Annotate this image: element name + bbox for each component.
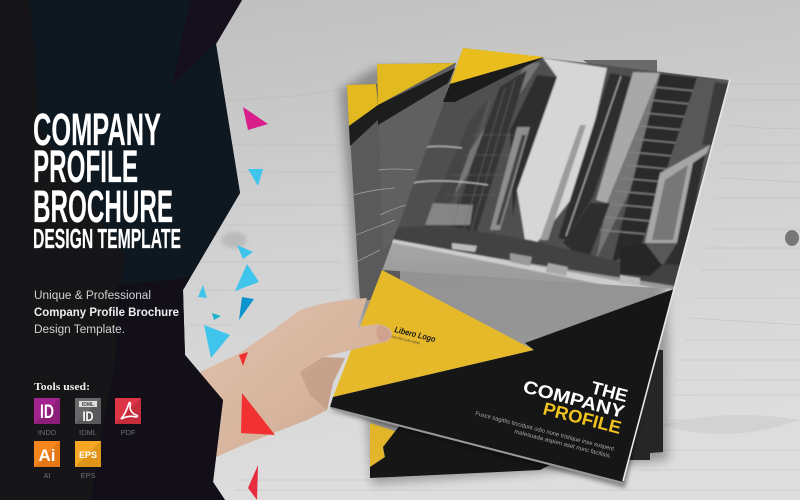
cover title: THE bbox=[589, 378, 630, 406]
icon: AI: Ai bbox=[38, 446, 56, 465]
icon: PDF: PDF bbox=[120, 428, 136, 437]
cover title: PROFILE bbox=[541, 399, 623, 438]
triangle teal bbox=[212, 313, 221, 320]
right buildings bbox=[558, 72, 730, 285]
triangle cyan 2 bbox=[237, 245, 253, 259]
triangle cyan large bbox=[204, 325, 230, 358]
cover shadow bbox=[328, 400, 640, 488]
yellow cover triangle bbox=[333, 270, 534, 397]
main title: DESIGN TEMPLATE bbox=[33, 223, 181, 254]
tools heading: Tools used: bbox=[34, 381, 90, 393]
description text: Design Template. bbox=[34, 324, 125, 336]
sky bbox=[517, 58, 607, 245]
cover body text: malesuada aspien aset nunc facilisis. bbox=[513, 429, 612, 460]
decorative triangles bbox=[198, 107, 275, 500]
description text: Unique & Professional bbox=[34, 290, 151, 302]
black cover shape bbox=[330, 289, 674, 482]
icon: IDML: IDML bbox=[79, 428, 97, 437]
icon: IDML: IDML bbox=[82, 402, 94, 408]
icon: EPS: EPS bbox=[80, 471, 96, 480]
icon: EPS bbox=[75, 441, 101, 480]
street level bbox=[382, 226, 680, 289]
triangle cyan small bbox=[198, 285, 207, 298]
dark side panel bbox=[0, 0, 262, 500]
icon: IDML: ID bbox=[82, 408, 94, 424]
icon: INDD: INDD bbox=[38, 428, 57, 437]
black band bbox=[443, 57, 544, 102]
logo: TAGLINE GOES HERE bbox=[390, 334, 420, 346]
third brochure bbox=[347, 83, 560, 478]
back photo peak bbox=[583, 60, 657, 72]
icon: PDF bbox=[115, 398, 141, 437]
back brochures stack bbox=[340, 60, 668, 484]
main title: BROCHURE bbox=[33, 181, 173, 232]
icon: INDD bbox=[34, 398, 60, 437]
yellow top flap bbox=[450, 48, 544, 84]
second brochure bbox=[354, 63, 456, 262]
triangle red small bbox=[239, 352, 248, 366]
hand holding brochure bbox=[200, 298, 392, 462]
main title: COMPANY bbox=[33, 104, 161, 155]
front brochure cover bbox=[328, 48, 730, 488]
main title: PROFILE bbox=[33, 141, 138, 192]
cover title bbox=[521, 377, 630, 438]
shadow of stack bbox=[340, 68, 668, 484]
description text bbox=[34, 290, 179, 336]
cover page edge bbox=[331, 79, 730, 483]
icon: IDML bbox=[75, 398, 101, 437]
triangle crimson bbox=[248, 465, 258, 500]
icon: INDD: ID bbox=[40, 402, 54, 423]
triangle cyan 3 bbox=[235, 264, 259, 291]
main title bbox=[33, 104, 181, 254]
triangle red large bbox=[241, 393, 275, 435]
cover photo: city street bbox=[382, 48, 729, 289]
icon: AI: AI bbox=[43, 471, 51, 480]
logo: Libero Logo bbox=[394, 324, 437, 344]
triangle cyan 1 bbox=[248, 169, 263, 186]
back dark edges right bbox=[625, 350, 663, 460]
icon: AI bbox=[34, 441, 60, 480]
cover body text: Fusce sagittis tincidunt odio none tristique inse suspent bbox=[474, 411, 615, 453]
description text: Company Profile Brochure bbox=[34, 307, 179, 319]
left buildings bbox=[412, 63, 557, 237]
cover title: COMPANY bbox=[521, 377, 627, 422]
icon: EPS: EPS bbox=[79, 450, 97, 460]
triangle magenta bbox=[243, 107, 268, 130]
triangle blue bbox=[239, 297, 254, 320]
